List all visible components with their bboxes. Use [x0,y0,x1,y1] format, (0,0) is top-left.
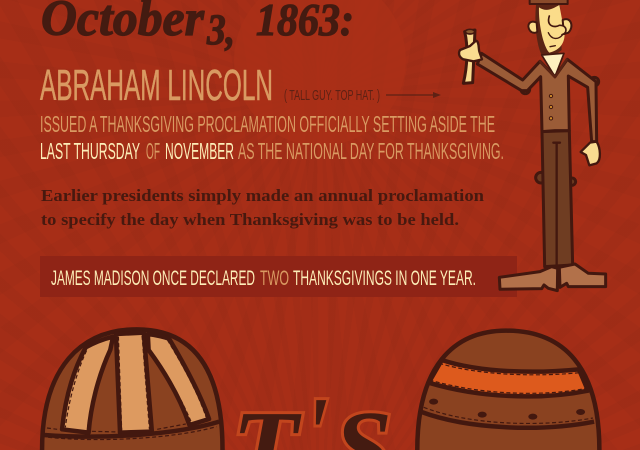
trousers [536,131,576,267]
text block: proclamation: NOVEMBER [165,138,234,164]
shoes [499,264,606,291]
callout: James Madison: JAMES MADISON ONCE DECLARED [51,266,255,290]
hand holding scroll [459,41,482,61]
icon: scroll [463,29,475,83]
text block: earlier presidents: Earlier presidents simply made an annual proclamation [41,186,485,205]
text block: earlier presidents: to specify the day when Thanksgiving was to be held. [41,210,459,229]
callout: James Madison: TWO [260,266,289,290]
illustration: Abraham Lincoln [459,0,606,291]
text block: proclamation [40,111,504,164]
head [528,5,571,57]
title: October 3, 1863 [41,0,354,54]
arrow: pointing to Lincoln [386,92,441,98]
text block: earlier presidents [41,186,485,229]
callout: James Madison [40,256,517,297]
text block: proclamation: OF [146,138,160,164]
icon: football left [42,329,223,450]
callout: James Madison: THANKSGIVINGS IN ONE YEAR. [293,266,476,290]
jacket [477,53,599,142]
buttons [549,94,553,120]
shirt and bow tie [542,53,564,77]
note: tall guy, top hat: ( TALL GUY. TOP HAT. ) [284,88,380,104]
title: October 3, 1863: 3, [206,7,235,54]
hat [530,0,568,4]
text block: proclamation: LAST THURSDAY [40,138,140,164]
heading: decorative letters [232,376,392,450]
heading: Abraham Lincoln: ABRAHAM LINCOLN [40,61,273,110]
icon: football right [417,331,599,450]
hand [581,142,600,165]
